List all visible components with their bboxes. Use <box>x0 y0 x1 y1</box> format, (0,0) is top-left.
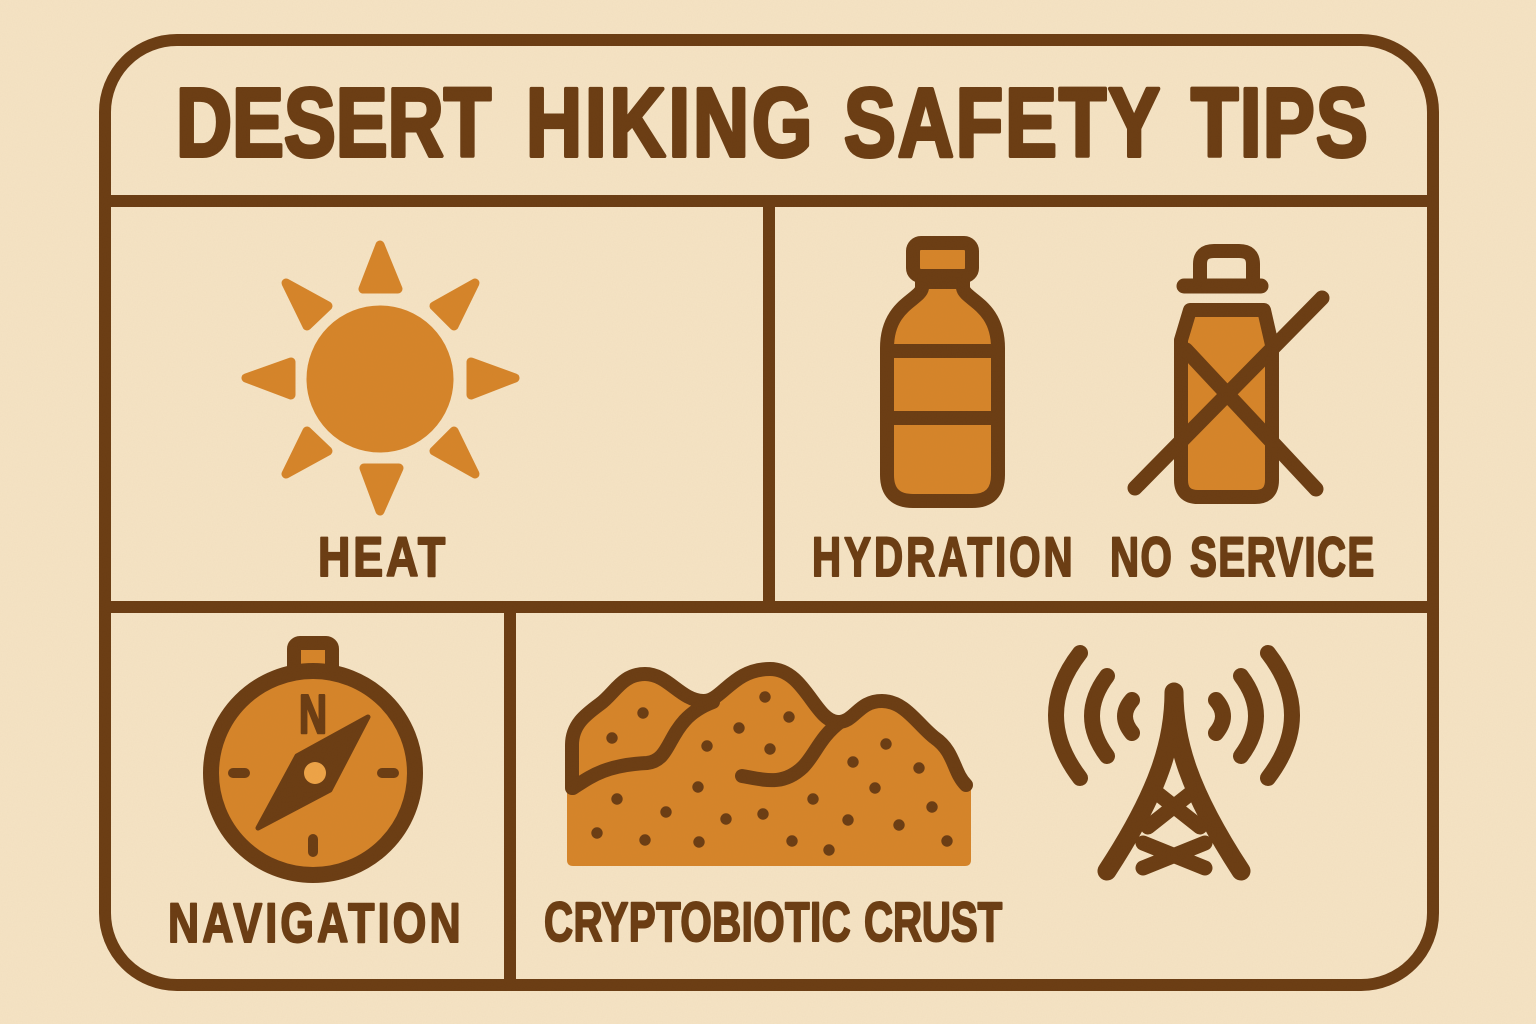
title: TIPS <box>1191 68 1368 177</box>
title: DESERT <box>176 68 491 177</box>
label: no service: NO <box>1110 527 1172 589</box>
icon: crossed out bottle <box>1135 251 1322 497</box>
icon: cryptobiotic crust mound <box>567 669 971 866</box>
icon: cell tower with signal waves <box>1056 653 1292 871</box>
title <box>176 68 1368 177</box>
label: cryptobiotic crust: CRUST <box>864 892 1002 954</box>
panel: heat <box>246 245 515 588</box>
title: HIKING <box>526 68 812 177</box>
title: SAFETY <box>844 68 1160 177</box>
icon: water bottle <box>887 243 998 501</box>
label: cryptobiotic crust: CRYPTOBIOTIC <box>544 892 851 954</box>
panel: hydration and no service <box>812 243 1374 589</box>
label: navigation: NAVIGATION <box>168 892 461 954</box>
icon: compass <box>211 643 415 875</box>
label: cryptobiotic crust <box>544 892 1002 954</box>
label: hydration: HYDRATION <box>812 527 1073 589</box>
label: no service <box>1110 527 1374 589</box>
panel: cryptobiotic crust and signal <box>544 653 1292 954</box>
label: heat: HEAT <box>318 525 445 588</box>
label: no service: SERVICE <box>1190 527 1374 589</box>
panel: navigation <box>168 643 461 954</box>
icon: sun <box>246 245 515 511</box>
outer frame with panel dividers <box>105 40 1433 985</box>
icon: compass: N <box>299 683 327 745</box>
